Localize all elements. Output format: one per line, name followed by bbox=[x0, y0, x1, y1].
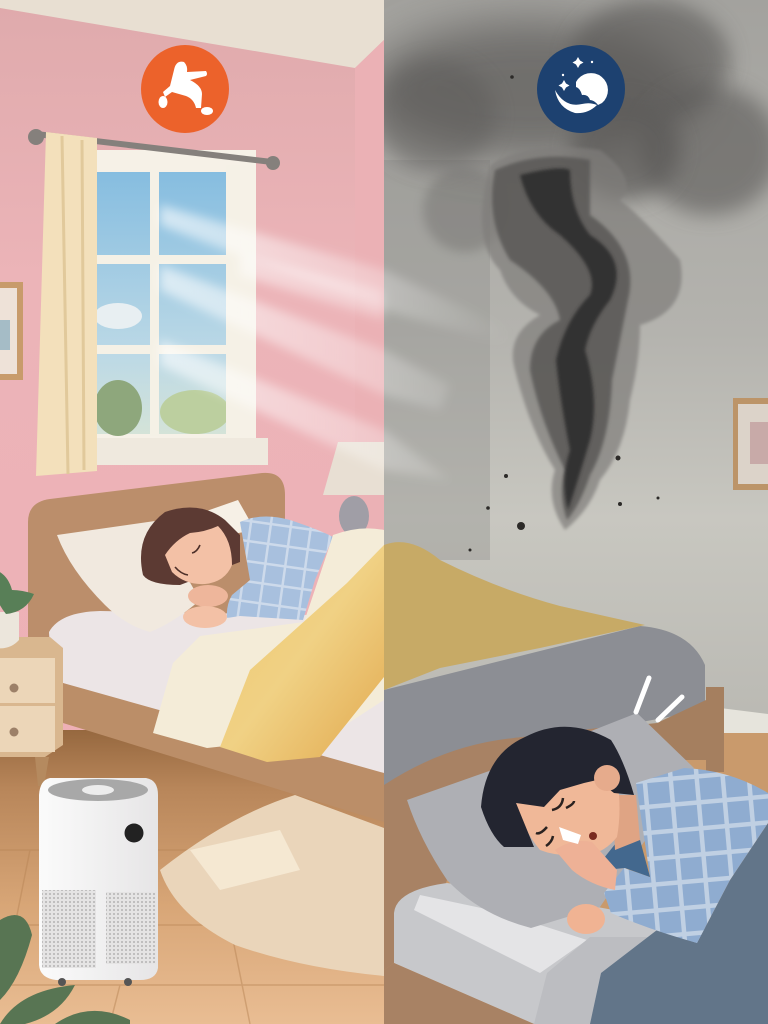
purifier bbox=[39, 778, 158, 986]
bed frame bbox=[63, 683, 384, 822]
right polluted room panel bbox=[365, 0, 768, 1024]
sleeper face bbox=[165, 526, 232, 584]
pillow bbox=[57, 521, 195, 613]
pillow back bbox=[208, 500, 249, 533]
gray wall bbox=[384, 0, 768, 740]
baseboard bbox=[724, 708, 768, 733]
front bed headboard bbox=[384, 723, 640, 970]
ceiling bbox=[0, 0, 384, 68]
rug bbox=[160, 795, 384, 976]
smoke plume bbox=[482, 147, 682, 530]
quilt right bbox=[384, 542, 645, 690]
light beams across both panels bbox=[160, 205, 510, 480]
left clean room panel bbox=[0, 0, 384, 1024]
wall picture bbox=[0, 282, 23, 380]
lower hand bbox=[567, 904, 605, 934]
wall corner shading bbox=[384, 160, 490, 560]
lower hand bbox=[183, 606, 227, 628]
inner shirt bbox=[604, 825, 650, 877]
front pajama bbox=[604, 768, 768, 943]
floor bbox=[0, 730, 384, 1024]
pink wall bbox=[0, 0, 384, 800]
eyes bbox=[536, 798, 574, 846]
tissue and hand bbox=[555, 827, 617, 890]
curtain rod bbox=[36, 134, 272, 162]
bed frame far bbox=[515, 687, 724, 772]
sun patch on rug bbox=[190, 830, 300, 890]
icon: orange exercise badge bbox=[141, 45, 229, 133]
curtain bbox=[36, 132, 97, 476]
front pillow bbox=[407, 713, 694, 928]
upper hand bbox=[188, 585, 228, 607]
wall picture bbox=[733, 398, 768, 490]
lamp bbox=[323, 442, 384, 536]
sleeper pajama body bbox=[227, 516, 333, 620]
mattress highlight bbox=[414, 895, 587, 973]
icon: navy night badge bbox=[537, 45, 625, 133]
mattress bbox=[49, 611, 384, 775]
front sheet bbox=[534, 937, 657, 1024]
floor bbox=[384, 733, 768, 1024]
coughing person hair bbox=[481, 727, 634, 847]
dust specks bbox=[468, 75, 660, 552]
coughing person face bbox=[516, 776, 620, 855]
yellow quilt left bbox=[220, 545, 384, 762]
headboard bbox=[28, 473, 285, 640]
front blanket bbox=[590, 823, 768, 1024]
sleeper hair bbox=[141, 508, 240, 585]
gray mattress bbox=[384, 626, 705, 790]
ear bbox=[594, 765, 620, 791]
cough marks bbox=[636, 678, 682, 720]
front bed mattress bbox=[394, 883, 720, 1024]
smoke top cloud bbox=[365, 0, 768, 252]
window bbox=[94, 150, 268, 465]
foreground leaves bbox=[0, 915, 130, 1024]
neck bbox=[612, 795, 640, 850]
white sheet bbox=[153, 528, 384, 748]
front bed footer bbox=[384, 963, 534, 1024]
plant bbox=[0, 570, 34, 648]
nightstand bbox=[0, 637, 63, 786]
